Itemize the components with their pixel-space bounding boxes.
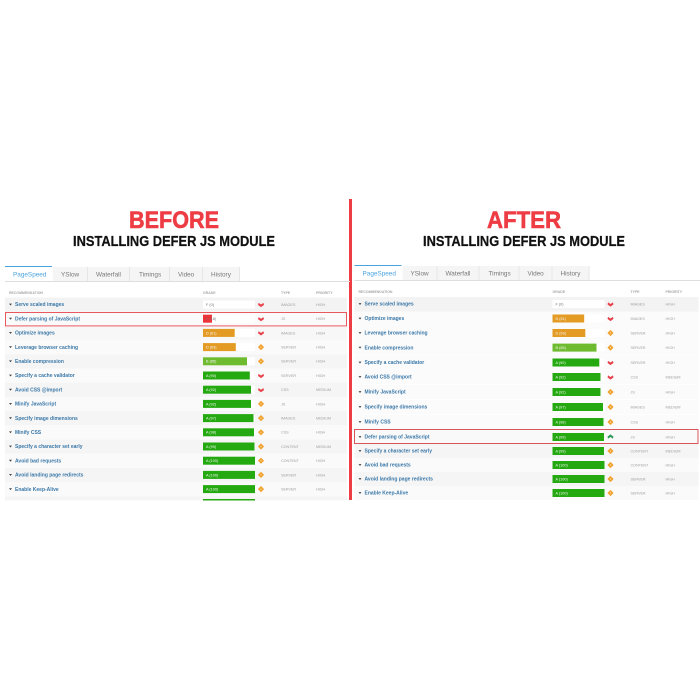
- tabs: after: [354, 265, 700, 281]
- row: defer parsing of javascript: HIGH: [316, 317, 326, 321]
- row: serve scaled images: [354, 297, 698, 312]
- tabs: after: YSlow: [410, 270, 429, 278]
- row: optimize images: D (61): [206, 331, 217, 335]
- row: minify css: CSS: [281, 431, 289, 435]
- row: specify image dimensions: Specify image dimensions: [364, 405, 428, 411]
- row: specify image dimensions: [5, 411, 347, 425]
- subheading: before: INSTALLING DEFER JS MODULE: [73, 233, 275, 250]
- row: enable keep-alive: [5, 482, 347, 496]
- row: enable compression: B (85): [206, 360, 217, 364]
- row: optimize images: IMAGES: [630, 317, 645, 321]
- row: enable keep-alive: Enable Keep-Alive: [364, 491, 408, 497]
- row: enable compression: [354, 341, 698, 355]
- row: serve scaled images: HIGH: [666, 302, 675, 306]
- row: optimize images: IMAGES: [281, 331, 296, 335]
- row: minify javascript: HIGH: [666, 390, 675, 394]
- row: serve scaled images: Serve scaled images: [15, 302, 64, 308]
- table header: before: GRADE: [203, 291, 216, 295]
- panel: after: [354, 207, 700, 500]
- row: leverage browser caching: [354, 326, 698, 340]
- row: avoid landing page redirects: A (100): [206, 473, 219, 477]
- row: specify image dimensions: A (97): [206, 417, 217, 421]
- row: avoid css import: Avoid CSS @import: [15, 387, 63, 393]
- row: avoid landing page redirects: Avoid landing page redirects: [15, 473, 84, 479]
- row: serve scaled images: F (0): [556, 302, 564, 306]
- row: specify a character set early: A (99): [206, 445, 217, 449]
- row: avoid css import: A (92): [556, 375, 566, 379]
- row: specify a character set early: MEDIUM: [666, 449, 680, 453]
- row: avoid bad requests: HIGH: [666, 463, 675, 467]
- row: optimize images: HIGH: [316, 331, 326, 335]
- row: defer parsing of javascript: [5, 312, 347, 326]
- row: enable keep-alive: SERVER: [281, 488, 296, 492]
- tabs: before: [5, 266, 350, 282]
- row: serve scaled images: F (0): [206, 303, 215, 307]
- row: defer parsing of javascript: HIGH: [666, 435, 675, 439]
- tabs: before: PageSpeed: [13, 272, 47, 278]
- row: minify javascript: Minify JavaScript: [364, 390, 406, 396]
- row: avoid css import: CSS: [281, 388, 289, 392]
- row: leverage browser caching: SERVER: [630, 331, 646, 335]
- row: enable compression: Enable compression: [15, 359, 64, 365]
- row: minify css: HIGH: [316, 431, 326, 435]
- row: avoid css import: MEDIUM: [666, 375, 680, 379]
- row: avoid landing page redirects: HIGH: [666, 477, 675, 481]
- row: minify javascript: A (92): [556, 390, 566, 394]
- row: leverage browser caching: D (63): [556, 331, 567, 335]
- row: optimize images: Optimize images: [15, 331, 55, 337]
- row: minify javascript: JS: [281, 402, 286, 406]
- tabs: before: Waterfall: [96, 272, 121, 278]
- tabs: after: PageSpeed: [362, 270, 396, 278]
- row: specify a cache validator: [354, 356, 698, 370]
- row: leverage browser caching: Leverage browser caching: [15, 345, 78, 351]
- row: specify a character set early: A (99): [556, 449, 566, 453]
- tabs: after: Timings: [488, 270, 511, 278]
- row: defer parsing of javascript: Defer parsing of JavaScript: [364, 435, 430, 441]
- heading: before: BEFORE: [129, 207, 219, 234]
- row: enable compression: HIGH: [666, 346, 675, 350]
- table header: after: GRADE: [552, 290, 566, 294]
- row: leverage browser caching: Leverage browser caching: [364, 331, 428, 337]
- row: leverage browser caching: SERVER: [281, 346, 296, 350]
- row: avoid landing page redirects: Avoid landing page redirects: [364, 477, 433, 483]
- row: defer parsing of javascript: JS: [281, 317, 286, 321]
- row: minify css: A (98): [206, 431, 217, 435]
- row: leverage browser caching: D (63): [206, 346, 217, 350]
- row: specify a character set early: Specify a character set early: [15, 444, 83, 450]
- subheading: after: INSTALLING DEFER JS MODULE: [423, 233, 625, 250]
- heading: after: AFTER: [487, 207, 561, 234]
- row: specify image dimensions: MEDIUM: [316, 417, 331, 421]
- row: specify a character set early: Specify a character set early: [364, 449, 432, 455]
- row: minify css: Minify CSS: [364, 420, 391, 426]
- row: specify a cache validator: Specify a cache validator: [15, 373, 75, 379]
- row: defer parsing of javascript: A (99): [556, 435, 566, 439]
- row: minify javascript: Minify JavaScript: [15, 402, 56, 408]
- row: specify image dimensions: IMAGES: [281, 417, 296, 421]
- row: leverage browser caching: [5, 340, 347, 354]
- table header: before: [9, 291, 333, 295]
- row: specify a character set early: [5, 440, 347, 454]
- row: enable keep-alive: HIGH: [316, 488, 326, 492]
- table header: after: [358, 290, 683, 294]
- row: avoid landing page redirects: HIGH: [316, 473, 326, 477]
- row: defer parsing of javascript: F (18): [206, 317, 217, 321]
- tabs: before: History: [211, 272, 232, 278]
- row: minify css: [5, 425, 347, 440]
- row: enable keep-alive: SERVER: [630, 491, 646, 495]
- row: avoid css import: CSS: [630, 375, 639, 379]
- row: enable compression: HIGH: [316, 360, 326, 364]
- table header: before: PRIORITY: [316, 291, 333, 295]
- row: enable keep-alive: [354, 486, 698, 500]
- row: avoid landing page redirects: SERVER: [281, 473, 296, 477]
- row: serve scaled images: HIGH: [316, 303, 326, 307]
- tabs: after: History: [560, 270, 581, 278]
- row: minify javascript: [354, 385, 698, 399]
- row: specify image dimensions: A (97): [556, 405, 566, 409]
- row: minify javascript: [5, 397, 347, 411]
- highlight box: defer parsing after: [354, 430, 698, 444]
- row: defer parsing of javascript: Defer parsing of JavaScript: [15, 316, 80, 322]
- row: enable keep-alive: HIGH: [666, 491, 675, 495]
- table header: after: RECOMMENDATION: [358, 290, 393, 294]
- row: avoid bad requests: Avoid bad requests: [364, 463, 411, 469]
- row: avoid bad requests: HIGH: [316, 459, 326, 463]
- row: specify a cache validator: A (90): [206, 374, 217, 378]
- row: optimize images: HIGH: [666, 317, 675, 321]
- row: avoid css import: A (92): [206, 388, 217, 392]
- row: avoid css import: MEDIUM: [316, 388, 331, 392]
- row: serve scaled images: Serve scaled images: [364, 302, 414, 308]
- row: specify a character set early: CONTENT: [281, 445, 300, 449]
- row: optimize images: [354, 312, 698, 326]
- row: specify a cache validator: SERVER: [281, 374, 296, 378]
- row: minify javascript: HIGH: [316, 402, 326, 406]
- row: avoid css import: [5, 383, 347, 397]
- row: serve scaled images: [5, 298, 347, 312]
- row: avoid bad requests: Avoid bad requests: [15, 458, 61, 464]
- row: enable keep-alive: A (100): [206, 488, 219, 492]
- panel: before: [5, 207, 350, 500]
- row: specify a cache validator: HIGH: [316, 374, 326, 378]
- row: specify a cache validator: [5, 368, 347, 383]
- table header: after: TYPE: [630, 290, 640, 294]
- row: enable compression: SERVER: [281, 360, 296, 364]
- row: avoid css import: [354, 370, 698, 384]
- row: minify javascript: A (92): [206, 402, 217, 406]
- row: avoid bad requests: A (100): [556, 463, 568, 467]
- row: avoid bad requests: CONTENT: [281, 459, 300, 463]
- row: enable compression: Enable compression: [364, 345, 413, 351]
- row: avoid bad requests: [354, 458, 698, 472]
- row: specify a cache validator: SERVER: [630, 361, 646, 365]
- tabs: before: Video: [178, 272, 195, 278]
- row: specify image dimensions: [354, 400, 698, 414]
- row: avoid bad requests: A (100): [206, 459, 219, 463]
- row: specify a character set early: CONTENT: [630, 449, 649, 453]
- row: avoid css import: Avoid CSS @import: [364, 375, 412, 381]
- row: specify image dimensions: IMAGES: [630, 405, 645, 409]
- table header: before: RECOMMENDATION: [9, 291, 43, 295]
- row: enable keep-alive: Enable Keep-Alive: [15, 487, 59, 493]
- row: defer parsing of javascript: [354, 430, 698, 444]
- highlight box: defer parsing before: [6, 312, 346, 326]
- row: specify a character set early: [354, 444, 698, 458]
- row: specify a cache validator: HIGH: [666, 361, 675, 365]
- tabs: after: Waterfall: [446, 270, 470, 278]
- row: minify css: HIGH: [666, 420, 675, 424]
- row: specify a cache validator: A (90): [556, 361, 566, 365]
- row: optimize images: D (61): [556, 317, 567, 321]
- row: enable compression: [5, 354, 347, 368]
- row: defer parsing of javascript: JS: [630, 435, 635, 439]
- row: specify image dimensions: MEDIUM: [666, 405, 680, 409]
- row: minify css: A (98): [556, 420, 566, 424]
- row: avoid bad requests: [5, 454, 347, 468]
- tabs: after: Video: [528, 270, 544, 278]
- cut-off row: [5, 496, 347, 500]
- row: minify css: CSS: [630, 420, 639, 424]
- row: optimize images: Optimize images: [364, 316, 404, 322]
- row: serve scaled images: IMAGES: [630, 302, 645, 306]
- row: enable keep-alive: A (100): [556, 491, 568, 495]
- table header: before: TYPE: [281, 291, 291, 295]
- row: specify a character set early: MEDIUM: [316, 445, 331, 449]
- center divider: [349, 199, 352, 500]
- row: serve scaled images: IMAGES: [281, 303, 296, 307]
- row: avoid landing page redirects: [5, 468, 347, 482]
- row: minify css: [354, 415, 698, 429]
- tabs: before: Timings: [139, 272, 161, 278]
- table header: after: PRIORITY: [666, 290, 683, 294]
- row: enable compression: SERVER: [630, 346, 646, 350]
- row: minify css: Minify CSS: [15, 430, 42, 436]
- row: leverage browser caching: HIGH: [316, 346, 326, 350]
- row: minify javascript: JS: [630, 390, 635, 394]
- row: specify a cache validator: Specify a cache validator: [364, 360, 424, 366]
- row: optimize images: [5, 326, 347, 340]
- row: specify image dimensions: Specify image dimensions: [15, 416, 78, 422]
- row: leverage browser caching: HIGH: [666, 331, 675, 335]
- row: enable compression: B (85): [556, 346, 567, 350]
- row: avoid landing page redirects: [354, 472, 698, 486]
- row: avoid bad requests: CONTENT: [630, 463, 649, 467]
- row: avoid landing page redirects: SERVER: [630, 477, 646, 481]
- row: avoid landing page redirects: A (100): [556, 477, 568, 481]
- tabs: before: YSlow: [61, 272, 79, 278]
